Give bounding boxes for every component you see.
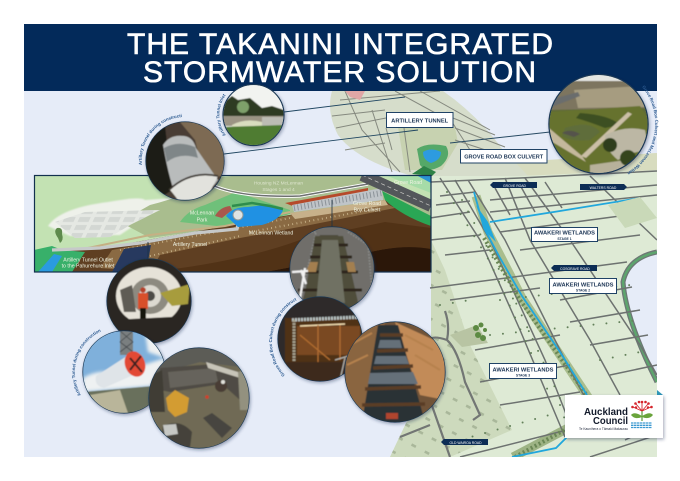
awakeri wetlands stage 1 label: AWAKERI WETLANDS — [534, 231, 595, 237]
section: berm road — [212, 184, 368, 196]
logo wordmark: Auckland — [584, 407, 628, 418]
section text: to the Pahurehure Inlet — [62, 264, 115, 270]
photo: grove road culvert aerial — [549, 74, 649, 174]
section: tan path surface — [88, 212, 290, 248]
road tag: walters road — [580, 184, 627, 190]
awakeri wetlands stage 1 label: STAGE 1 — [557, 237, 572, 241]
section: grey buildings — [55, 210, 160, 238]
section: red spoil — [285, 188, 368, 207]
map: main suburban area — [390, 170, 657, 457]
leader lines from photos — [224, 97, 418, 154]
section: grove road deck — [362, 175, 431, 206]
map: leader line to aerial photo — [450, 132, 550, 143]
section: green outlet bank — [34, 246, 85, 272]
section: white urban haze — [48, 198, 175, 236]
section text: McLennan Wetland — [249, 230, 293, 236]
road tag: walters road: WALTERS ROAD — [590, 186, 617, 190]
artillery tunnel label — [386, 112, 453, 128]
section: right green bank — [382, 191, 431, 226]
map: tan band — [517, 153, 657, 176]
awakeri wetlands stage 3 label — [490, 364, 556, 378]
auckland council logo card — [565, 395, 663, 438]
section text: Housing NZ McLennan — [254, 180, 303, 186]
map: streets — [430, 171, 660, 457]
photo: tunnel boring machine being lifted — [83, 331, 165, 413]
logo tagline: Te Kaunihera o Tāmaki Makaurau — [579, 427, 628, 431]
section: wetland water — [226, 205, 283, 227]
title banner — [24, 24, 657, 91]
section: olive parkland — [120, 175, 431, 238]
map: tree cluster — [473, 322, 487, 341]
section: outlet stream — [38, 254, 62, 272]
grove road box culvert label: GROVE ROAD BOX CULVERT — [464, 155, 544, 161]
section: speckled upper soil — [100, 203, 395, 272]
map: upper corridor streets — [332, 91, 510, 172]
map: street trees — [440, 192, 650, 440]
section: mid green banks — [180, 192, 290, 228]
section: culvert stripes — [294, 193, 382, 208]
awakeri wetlands stage 3 label: STAGE 3 — [516, 373, 530, 377]
section: outlet tree — [55, 228, 63, 243]
awakeri wetlands stage 3 label: AWAKERI WETLANDS — [492, 367, 554, 373]
road tag: old wairoa road: OLD WAIROA ROAD — [449, 441, 482, 445]
map: upper tunnel corridor — [330, 91, 654, 176]
section: wetland planting — [215, 206, 232, 218]
road tag: old wairoa road — [441, 439, 488, 445]
section text — [62, 180, 422, 270]
map: Awakeri stream — [474, 192, 640, 457]
caption: artillery tunnel inlet: Artillery Tunnel Inlet — [216, 94, 226, 136]
section: navy shaft wedge — [112, 245, 151, 272]
caption: artillery tunnel during construction 2: Artillery Tunnel during construction — [72, 330, 101, 396]
title line 2: STORMWATER SOLUTION — [143, 56, 536, 89]
section: brown ground — [34, 200, 431, 272]
panel: cross-section of the stormwater solution — [34, 175, 431, 272]
icon: water waves — [631, 423, 652, 428]
section: dark bedrock — [265, 247, 431, 272]
section: leader to photo — [148, 200, 332, 262]
photo: artillery tunnel inlet — [223, 84, 284, 146]
section text: Park — [197, 218, 208, 224]
section: box culvert — [292, 188, 383, 212]
section text: Grove Road — [394, 180, 422, 186]
photo: culvert trench from above — [345, 322, 445, 422]
map: wetland planting — [484, 238, 590, 457]
section: inlet shaft — [233, 210, 243, 220]
title line 1: THE TAKANINI INTEGRATED — [127, 28, 553, 61]
road tag: grove road — [490, 182, 537, 188]
artillery tunnel label: ARTILLERY TUNNEL — [391, 119, 449, 125]
caption: grove road box culvert and mclennan wetlands: Grove Road Box Culvert and McLennan Wetlands — [628, 86, 658, 174]
section text: Stages 1 and 4 — [262, 187, 295, 193]
road tag: cosgrave road: COSGRAVE ROAD — [560, 267, 590, 271]
map: right edge green road — [623, 252, 657, 382]
map: open paddock — [450, 325, 488, 347]
photo: inside the tunnel — [107, 259, 191, 343]
map: red pond detail — [345, 91, 365, 100]
section text: Artillery Tunnel — [173, 242, 207, 248]
section text: McLennan — [190, 210, 214, 216]
grove road box culvert label — [460, 150, 547, 163]
section text: Grove Road — [353, 201, 381, 207]
section: sky-green background — [35, 176, 430, 250]
awakeri wetlands stage 2 label: STAGE 2 — [576, 288, 590, 292]
photo: box culvert formwork — [278, 297, 362, 381]
section: artillery tunnel pipe — [52, 225, 239, 252]
caption: grove road box culvert during construction: Grove Road Box Culvert during construction — [269, 298, 297, 376]
section text: Box Culvert — [354, 208, 381, 214]
map: upper corridor olive park — [398, 127, 458, 170]
section: sandy culvert bed — [290, 200, 388, 219]
photo: box culvert trench — [290, 227, 374, 311]
icon: pohutukawa flower — [631, 401, 653, 421]
logo wordmark line 2: Council — [593, 416, 628, 427]
map: south-west loop road — [400, 311, 480, 457]
road tag: grove road: GROVE ROAD — [503, 184, 527, 188]
map: grove road wetland — [412, 145, 448, 176]
awakeri wetlands stage 1 label — [532, 228, 598, 242]
map: south-west housing block — [390, 240, 512, 457]
awakeri wetlands stage 2 label — [550, 278, 616, 294]
awakeri wetlands stage 2 label: AWAKERI WETLANDS — [552, 282, 614, 288]
photo: tunnel launch pit — [149, 348, 249, 448]
teal corner tab — [657, 390, 663, 395]
road tag: cosgrave road — [551, 265, 597, 271]
photo: artillery tunnel during construction — [146, 122, 224, 200]
map: playing fields — [608, 197, 657, 228]
poster background panel — [24, 91, 657, 457]
section text: Artillery Tunnel Outlet — [63, 258, 113, 264]
map: wetland corridor — [476, 196, 590, 400]
aerial map — [330, 91, 660, 457]
